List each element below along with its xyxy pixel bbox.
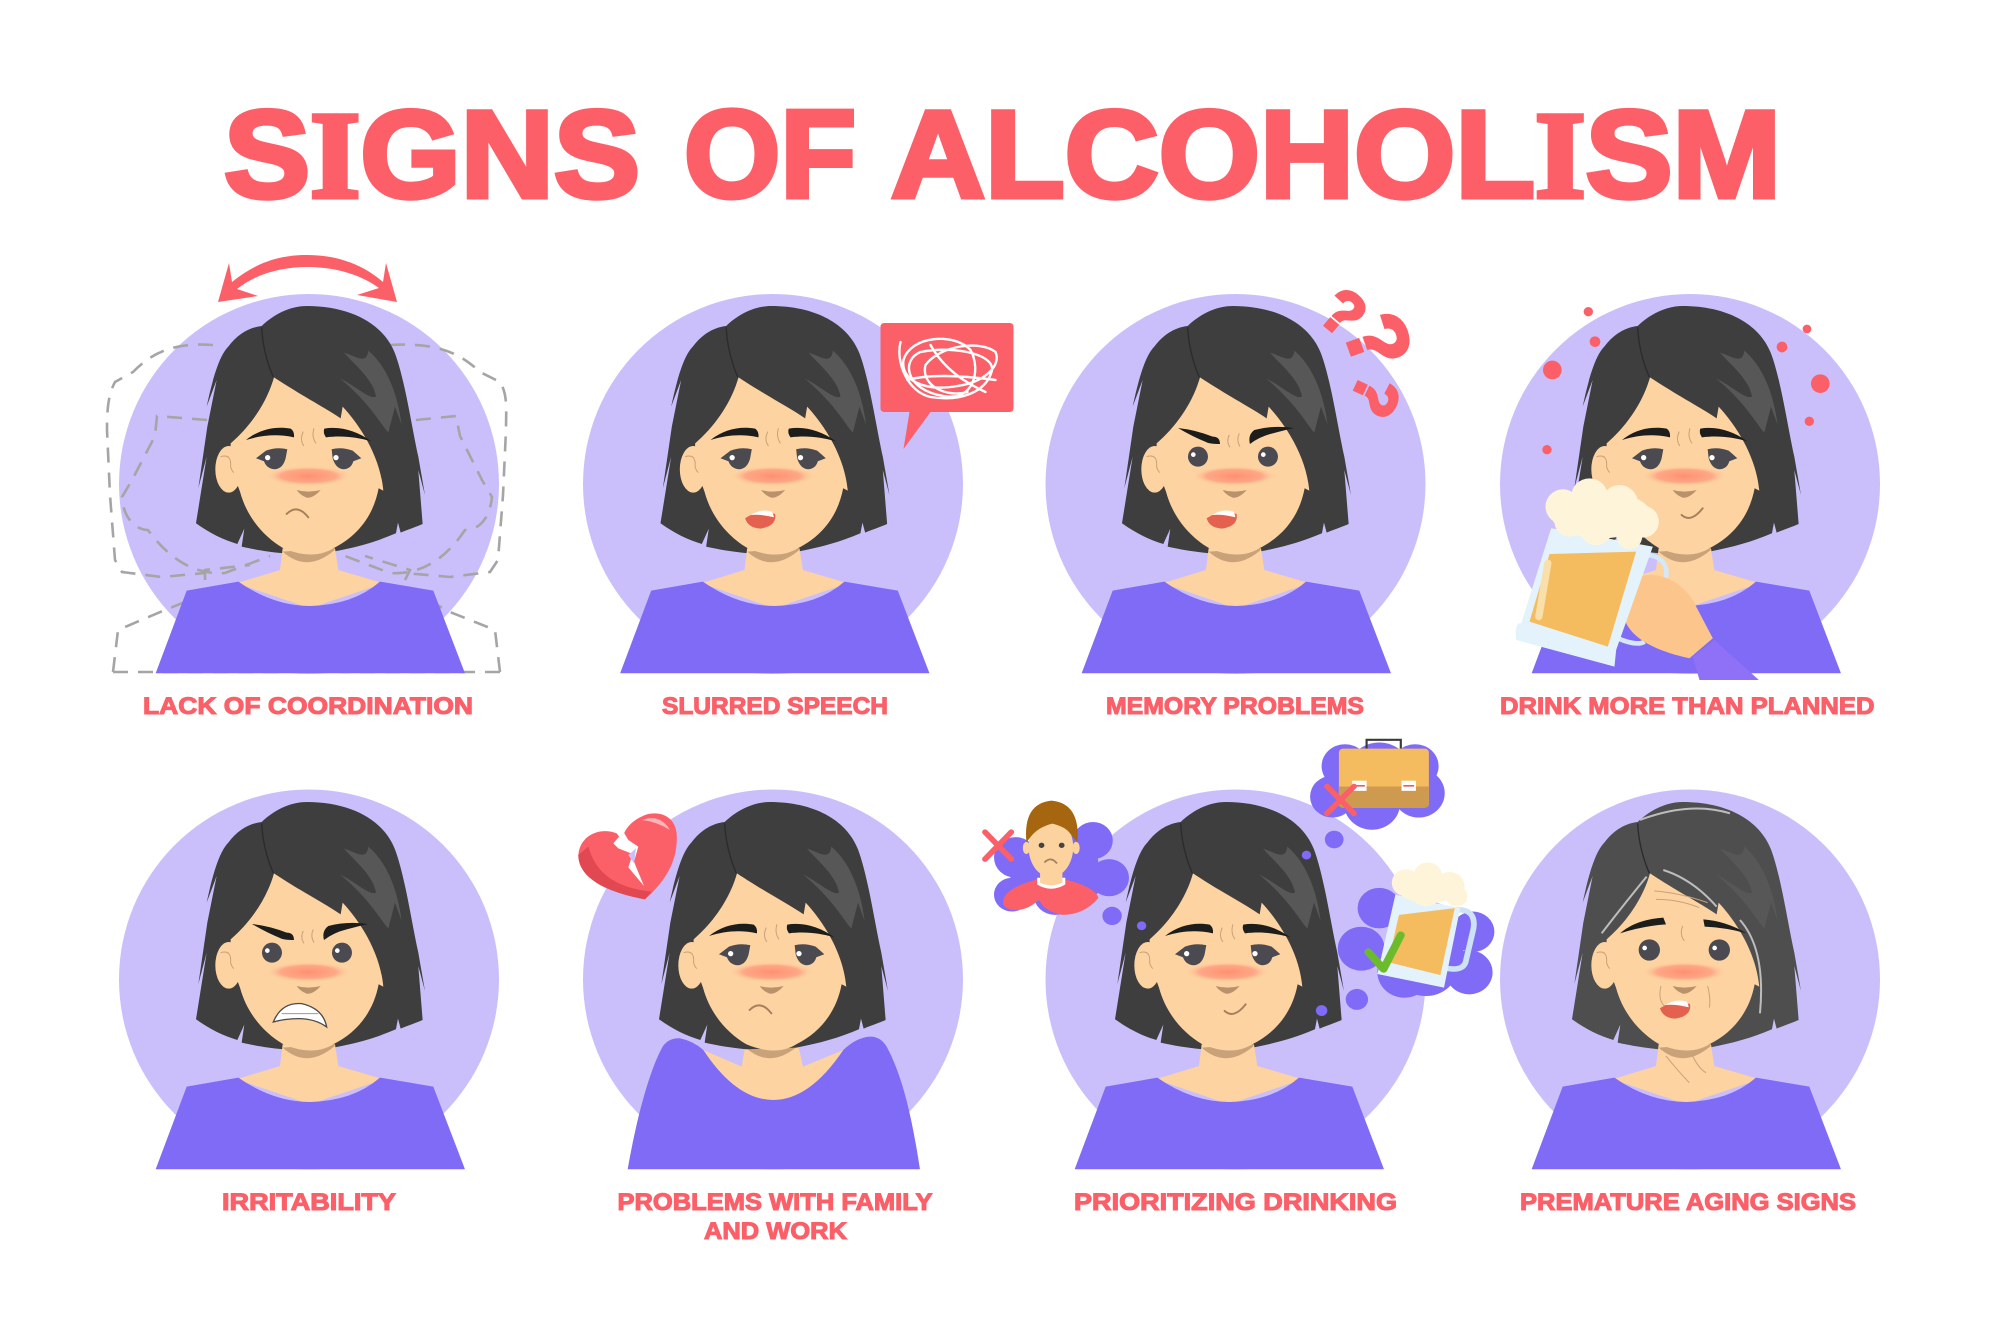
title: ALCOHOLISM bbox=[891, 86, 1781, 224]
icon: dashed ghost outlines bbox=[107, 345, 506, 672]
icon: question marks: ? bbox=[1324, 301, 1431, 382]
figure bbox=[1532, 306, 1841, 673]
thought: beer bbox=[1316, 863, 1494, 1016]
title bbox=[224, 86, 1781, 224]
panel: prioritizing drinking bbox=[985, 740, 1494, 1216]
figure bbox=[156, 802, 465, 1169]
icon: broken heart bbox=[578, 813, 677, 899]
label: PRIORITIZING DRINKING bbox=[1074, 1189, 1397, 1216]
label: LACK OF COORDINATION bbox=[143, 693, 473, 720]
title: OF bbox=[684, 86, 856, 224]
panel: slurred speech bbox=[583, 294, 1014, 720]
icon: question marks: ? bbox=[1306, 275, 1379, 352]
label: SLURRED SPEECH bbox=[662, 693, 888, 720]
figure bbox=[1082, 306, 1391, 673]
label line two: AND WORK bbox=[704, 1218, 847, 1245]
label: IRRITABILITY bbox=[222, 1189, 396, 1216]
icon: beer mug in hand bbox=[1516, 478, 1759, 680]
icon: dizzy dots bbox=[1542, 307, 1830, 454]
icon: question marks: ? bbox=[1335, 364, 1414, 428]
figure bbox=[1075, 802, 1384, 1169]
icon: speech bubble with scribble bbox=[880, 323, 1014, 449]
label: MEMORY PROBLEMS bbox=[1106, 693, 1364, 720]
arrow: swaying bbox=[218, 255, 397, 302]
figure bbox=[1532, 802, 1841, 1169]
panel: drink more than planned bbox=[1500, 294, 1880, 720]
figure bbox=[628, 802, 920, 1169]
panel: lack of coordination bbox=[107, 255, 506, 720]
icon: thought clouds bbox=[985, 740, 1494, 1016]
panel: premature aging signs bbox=[1500, 790, 1880, 1216]
thought: partner bbox=[985, 801, 1146, 930]
panel: problems with family and work bbox=[578, 790, 963, 1245]
figure bbox=[620, 306, 929, 673]
title: SIGNS bbox=[224, 86, 640, 224]
panel: memory problems bbox=[1046, 275, 1431, 720]
panel: irritability bbox=[119, 790, 499, 1216]
figure: neutral sad woman bbox=[156, 306, 465, 673]
label: PREMATURE AGING SIGNS bbox=[1520, 1189, 1856, 1216]
label: DRINK MORE THAN PLANNED bbox=[1500, 693, 1874, 720]
thought: briefcase bbox=[1302, 740, 1445, 859]
label: PROBLEMS WITH FAMILY bbox=[618, 1189, 932, 1216]
icon: question marks bbox=[1306, 275, 1431, 428]
